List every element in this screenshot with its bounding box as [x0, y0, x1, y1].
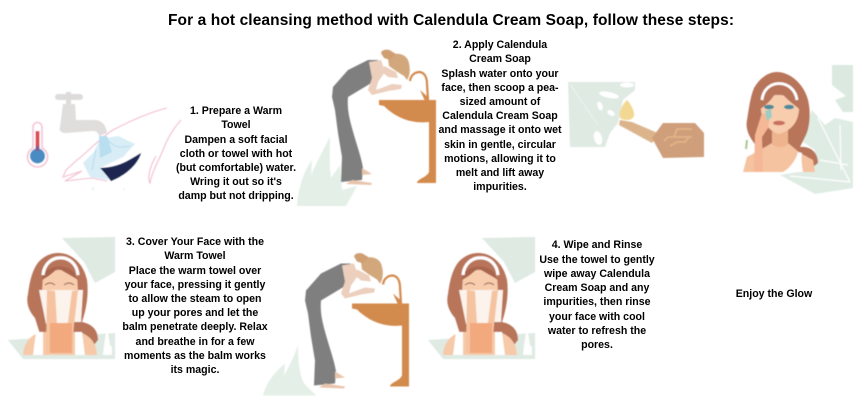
title: For a hot cleansing method with Calendula Cream Soap, follow these steps:	[168, 12, 734, 29]
lips	[773, 121, 785, 125]
step 4 text: 4. Wipe and Rinse	[552, 239, 642, 251]
towel	[83, 136, 135, 180]
shoulders and chest	[743, 143, 815, 172]
face	[382, 66, 398, 78]
faucet	[58, 92, 107, 136]
feet	[346, 168, 372, 185]
sink	[379, 100, 436, 183]
step 1 text: cloth or towel with hot	[180, 148, 293, 160]
step 3 text: up your pores and let the	[132, 307, 258, 319]
dark cloth	[100, 153, 141, 181]
step 4 text: water to refresh the	[547, 325, 646, 337]
hand	[652, 123, 704, 158]
hands	[466, 290, 498, 353]
bottle	[103, 333, 112, 355]
illustration: hand with soap	[568, 82, 704, 158]
hair	[747, 72, 818, 167]
step 3 text: Place the warm towel over	[129, 265, 261, 277]
fringe	[462, 266, 498, 280]
step 2 text: skin in gentle, circular	[444, 139, 556, 151]
step 3 text	[122, 236, 268, 376]
hair	[361, 257, 383, 284]
leaves	[62, 237, 115, 283]
face	[355, 270, 371, 282]
step 4 text: your face with cool	[549, 311, 645, 323]
shoulders	[23, 332, 97, 355]
step 2 text: 2. Apply Calendula	[453, 39, 547, 51]
water stream	[99, 136, 112, 158]
illustration: woman covering face, step 3	[8, 237, 115, 359]
step 1 text: 1. Prepare a Warm	[190, 105, 282, 117]
body	[332, 60, 378, 182]
plant	[263, 346, 316, 396]
closing text: enjoy the glow: Enjoy the Glow	[736, 288, 813, 300]
neck	[470, 323, 492, 353]
faucet	[383, 276, 401, 304]
closed eyes	[45, 283, 74, 285]
step 2 text: Calendula Cream Soap	[442, 110, 558, 122]
step 2 text: and massage it onto wet	[438, 124, 562, 136]
illustration: woman covering face, step 4	[428, 237, 535, 359]
step 3 text: balm penetrate deeply. Relax	[122, 321, 268, 333]
illustration: woman with facial tool	[743, 65, 853, 194]
hair	[27, 253, 98, 345]
body	[305, 264, 351, 386]
soap blob	[620, 100, 634, 120]
step 3 text: moments as the balm works	[124, 350, 266, 362]
headband	[43, 258, 78, 275]
illustration: woman at sink, lower row	[263, 253, 409, 396]
hands outline	[63, 108, 181, 183]
leaves	[482, 237, 535, 283]
faucet	[410, 72, 428, 100]
headband	[463, 258, 498, 275]
step 4 text	[539, 239, 655, 351]
icon: warm towel under faucet	[28, 92, 181, 190]
neck	[50, 323, 72, 353]
straps	[453, 332, 505, 355]
fringe	[42, 266, 78, 280]
eyes	[764, 105, 774, 109]
step 4 text: Use the towel to gently	[539, 254, 655, 266]
finger	[619, 120, 660, 143]
arm	[341, 264, 375, 298]
step 2 text: Cream Soap	[469, 53, 531, 65]
feet	[319, 372, 345, 388]
step 2 text: melt and lift away	[456, 167, 544, 179]
step 1 text: Towel	[221, 119, 251, 131]
forehead	[42, 270, 78, 292]
step 4 text: Cream Soap and any	[545, 282, 650, 294]
step 1 text: damp but not dripping.	[178, 190, 294, 202]
closed eyes	[465, 283, 494, 285]
fringe	[759, 84, 800, 110]
step 1 text	[176, 105, 296, 202]
sink	[352, 304, 409, 386]
step 3 text: Warm Towel	[164, 250, 226, 262]
step 3 text: its magic.	[171, 364, 219, 376]
neck	[772, 128, 788, 147]
tank top	[783, 152, 803, 172]
towel	[39, 290, 83, 324]
shoulders	[443, 332, 517, 355]
step 2 text: face, then scoop a pea-	[441, 82, 559, 94]
step 2 text	[438, 39, 562, 193]
step 4 text: wipe away Calendula	[543, 268, 650, 280]
step 3 text: your face, pressing it gently	[125, 279, 265, 291]
step 2 text: motions, allowing it to	[444, 153, 556, 165]
step 2 text: impurities.	[473, 181, 527, 193]
leaf	[568, 82, 635, 147]
step 3 text: and breathe in for a few	[136, 336, 255, 348]
hands	[46, 290, 78, 353]
face	[761, 95, 799, 134]
step 1 text: Wring it out so it's	[190, 176, 282, 188]
step 1 text: Dampen a soft facial	[184, 134, 288, 146]
step 1 text: (but comfortable) water.	[176, 162, 296, 174]
step 4 text: pores.	[581, 339, 613, 351]
headband	[762, 84, 797, 100]
plant	[297, 137, 357, 206]
step 2 text: sized amount of	[460, 96, 541, 108]
forehead	[462, 270, 498, 292]
hair	[388, 54, 410, 80]
arm and hand with tool	[754, 113, 770, 172]
palm leaves	[832, 65, 853, 112]
step 3 text: 3. Cover Your Face with the	[126, 236, 264, 248]
step 4 text: impurities, then rinse	[543, 296, 651, 308]
towel	[459, 290, 503, 324]
straps	[33, 332, 85, 355]
arm	[368, 60, 402, 95]
step 3 text: to allow the steam to open	[128, 293, 262, 305]
step 2 text: Splash water onto your	[441, 68, 559, 80]
illustration: woman at sink, step 2	[297, 50, 436, 206]
bottle	[523, 333, 532, 355]
icon: thermometer	[28, 123, 48, 167]
hair	[447, 253, 518, 345]
